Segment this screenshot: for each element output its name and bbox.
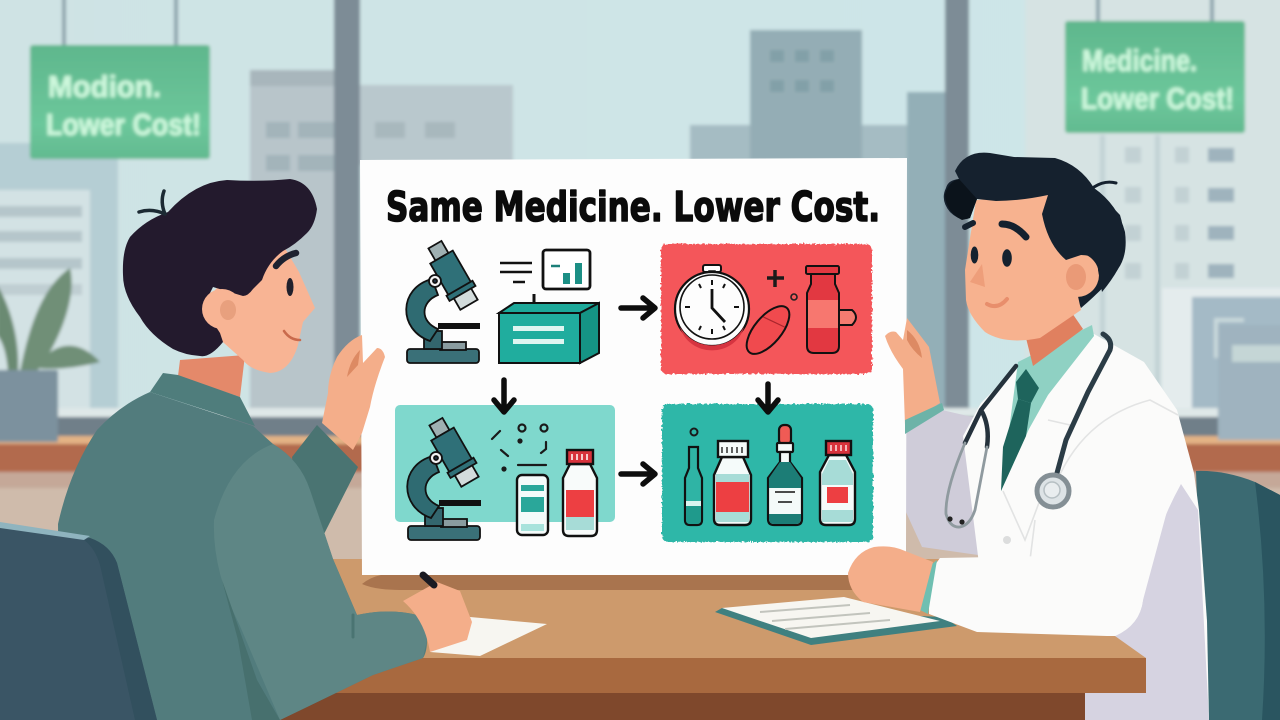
- microscope top: [406, 237, 482, 363]
- sign text: Lower Cost!: [1081, 81, 1234, 116]
- poster title: Same Medicine. Lower Cost.: [386, 183, 880, 231]
- hair curl: [1094, 182, 1116, 187]
- jacket torso: [58, 392, 427, 720]
- paper: [430, 617, 547, 656]
- sleeve lighter: [214, 444, 427, 720]
- ear: [202, 289, 242, 329]
- sign text: [1081, 43, 1234, 116]
- bottle with label: [820, 441, 855, 525]
- coat button: [1003, 536, 1011, 544]
- ear: [1055, 253, 1099, 297]
- green sign right: [1065, 0, 1245, 133]
- chart and machine: [499, 250, 599, 363]
- collar: [150, 373, 255, 426]
- red bottle: [806, 266, 856, 353]
- poster sheet: [360, 158, 907, 575]
- plant: [0, 268, 100, 442]
- dot: [791, 294, 797, 300]
- right building: [1025, 0, 1280, 415]
- teal panel: [662, 404, 873, 542]
- lapel details: [1003, 420, 1070, 560]
- right cabinet: [1218, 325, 1280, 440]
- doctor lower arm: [848, 500, 1170, 636]
- raised hand: [322, 335, 385, 450]
- smile: [284, 331, 300, 340]
- doctor upper body: [905, 153, 1209, 720]
- neck: [178, 355, 245, 397]
- shoulder seam: [1050, 400, 1178, 500]
- sign text: [46, 69, 201, 142]
- sign text: Medicine.: [1082, 43, 1197, 78]
- green sign left: [30, 0, 210, 159]
- ear and face: [215, 245, 315, 373]
- arrow down right: [758, 384, 778, 412]
- centre-left buildings: [250, 70, 513, 410]
- small dot: [690, 428, 698, 436]
- left chair: [0, 522, 157, 720]
- left building: [0, 143, 118, 418]
- right office block: [1162, 288, 1280, 415]
- face: [965, 195, 1081, 340]
- lower wall: [0, 410, 1280, 720]
- window mullions: [334, 0, 969, 415]
- coat shaded side: [1085, 484, 1209, 720]
- under-sleeve shade: [222, 580, 280, 720]
- eye and brow: [276, 253, 296, 296]
- hair back: [1048, 188, 1126, 308]
- red panel: [661, 244, 872, 374]
- poster: [360, 158, 907, 575]
- tie: [1001, 369, 1039, 491]
- large bottle: [714, 441, 751, 525]
- raised sleeve: [292, 425, 358, 538]
- sign text: Lower Cost!: [46, 107, 201, 142]
- right chair: [1196, 471, 1280, 720]
- doctor raised hand: [885, 318, 944, 434]
- bottle with red cap: [563, 450, 597, 536]
- hair: [123, 179, 317, 356]
- desk: [257, 559, 1146, 720]
- arrow right bottom: [621, 464, 655, 484]
- white coat body: [963, 334, 1209, 720]
- notebook: [715, 597, 957, 645]
- centre-right buildings: [690, 30, 949, 415]
- arrow right top: [621, 298, 655, 318]
- stethoscope: [946, 334, 1111, 527]
- vial: [517, 475, 548, 535]
- hand crease: [347, 350, 360, 377]
- window sill: [0, 408, 1280, 488]
- writing hand: [403, 582, 472, 652]
- microscope bottom: [407, 414, 483, 540]
- hair tuft: [139, 191, 165, 214]
- sleeve crease: [352, 615, 354, 637]
- sign text: Modion.: [48, 69, 161, 104]
- patient: [58, 179, 547, 720]
- ampoule: [685, 447, 702, 525]
- sleeve: [929, 500, 1170, 636]
- shirt: [1001, 325, 1094, 491]
- plus sign: [767, 270, 784, 287]
- hair front shade: [945, 179, 977, 220]
- raised sleeve shaded: [905, 410, 985, 556]
- dropper bottle: [768, 425, 802, 525]
- hair front: [944, 153, 1124, 292]
- particles: [492, 424, 548, 470]
- capsule: [739, 299, 797, 361]
- neck: [1024, 310, 1083, 366]
- stopwatch: [675, 265, 749, 350]
- light teal panel: [395, 405, 615, 522]
- nose: [970, 264, 985, 287]
- cuff: [920, 560, 937, 614]
- eyes and brows: [965, 223, 1026, 267]
- smile: [987, 299, 1007, 306]
- arrow down left: [494, 380, 514, 412]
- doctor lower hand: [848, 546, 933, 612]
- pen: [423, 575, 434, 585]
